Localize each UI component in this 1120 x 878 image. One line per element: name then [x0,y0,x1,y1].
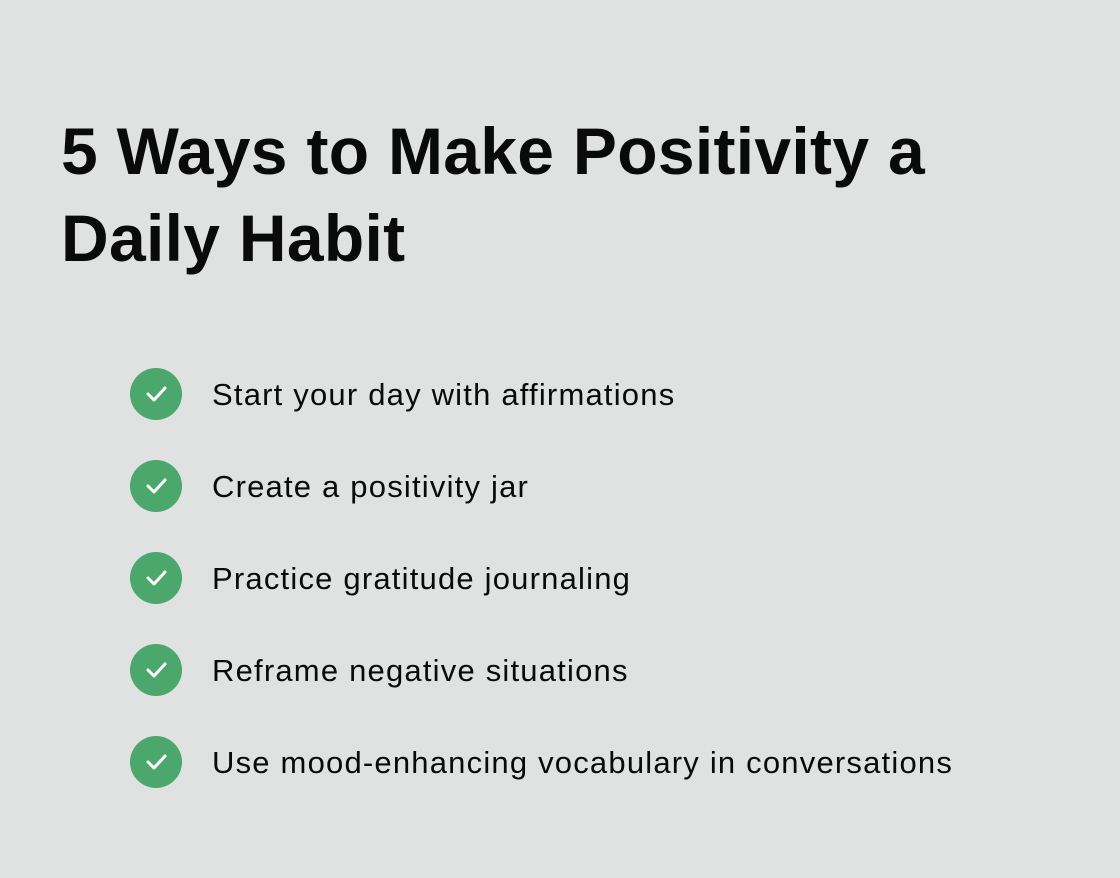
item 1 [130,368,675,420]
text: Create a positivity jar [212,469,529,504]
icon: check [130,644,182,696]
icon: check [130,368,182,420]
title: Daily Habit [61,201,405,275]
icon: check [130,460,182,512]
item 5 [130,736,953,788]
title [61,114,926,275]
item 2 [130,460,529,512]
icon: check [130,736,182,788]
icon: check [130,552,182,604]
text: Start your day with affirmations [212,377,675,412]
text: Reframe negative situations [212,653,629,688]
item 4 [130,644,629,696]
text: Practice gratitude journaling [212,561,631,596]
text: Use mood-enhancing vocabulary in conversations [212,745,953,780]
item 3 [130,552,631,604]
title: 5 Ways to Make Positivity a [61,114,925,188]
